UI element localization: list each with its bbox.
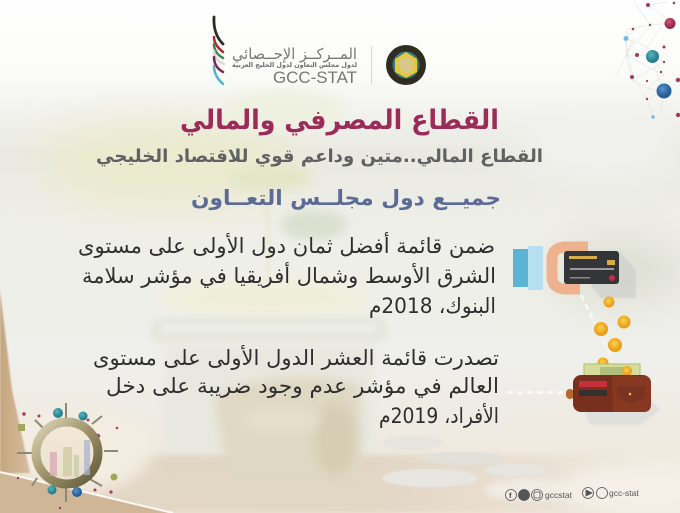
network graphic: top right xyxy=(615,2,680,119)
text block: no personal income tax xyxy=(93,345,499,428)
handle: gcc-stat: gcc-stat xyxy=(609,488,639,498)
logo ribbon mark xyxy=(214,17,224,84)
text block: banking soundness xyxy=(78,232,496,318)
logo Arabic subtitle: لدول مجلس التعاون لدول الخليج العربية xyxy=(232,61,357,69)
title: القطاع المصرفي والمالي xyxy=(180,105,499,136)
subtitle: القطاع المالي..متين وداعم قوي للاقتصاد الخليجي xyxy=(96,146,543,167)
text block: banking soundness: البنوك، 2018م xyxy=(369,294,496,318)
text block: no personal income tax: تصدرت قائمة العشر الدول الأولى على مستوى xyxy=(93,345,499,370)
icon: wallet with banknotes xyxy=(507,364,660,425)
icon: coins falling xyxy=(581,295,630,368)
text block: banking soundness: الشرق الأوسط وشمال أفريقيا في مؤشر سلامة xyxy=(82,262,496,288)
icon: hand holding credit card xyxy=(513,246,636,298)
heading: all GCC countries: جميــع دول مجلــس التعــاون xyxy=(191,186,501,210)
text block: banking soundness: ضمن قائمة أفضل ثمان دول الأولى على مستوى xyxy=(78,232,495,258)
text block: no personal income tax: العالم في مؤشر عدم وجود ضريبة على دخل xyxy=(106,374,499,399)
logo Latin name: GCC-STAT xyxy=(273,69,357,87)
GCC emblem xyxy=(386,45,426,85)
handle: gccstat: gccstat xyxy=(545,490,573,500)
logo: GCC-STAT xyxy=(214,17,426,87)
social icons: facebook, twitter, instagram xyxy=(506,490,542,500)
logo Arabic name: المــركــز الإحــصائي xyxy=(232,45,357,64)
social icons: youtube, snapchat xyxy=(582,488,608,498)
social media handles xyxy=(506,488,639,500)
social media handles: f xyxy=(509,491,512,500)
emblem: ship wheel with city skyline xyxy=(17,403,118,509)
text block: no personal income tax: الأفراد، 2019م xyxy=(379,403,499,428)
